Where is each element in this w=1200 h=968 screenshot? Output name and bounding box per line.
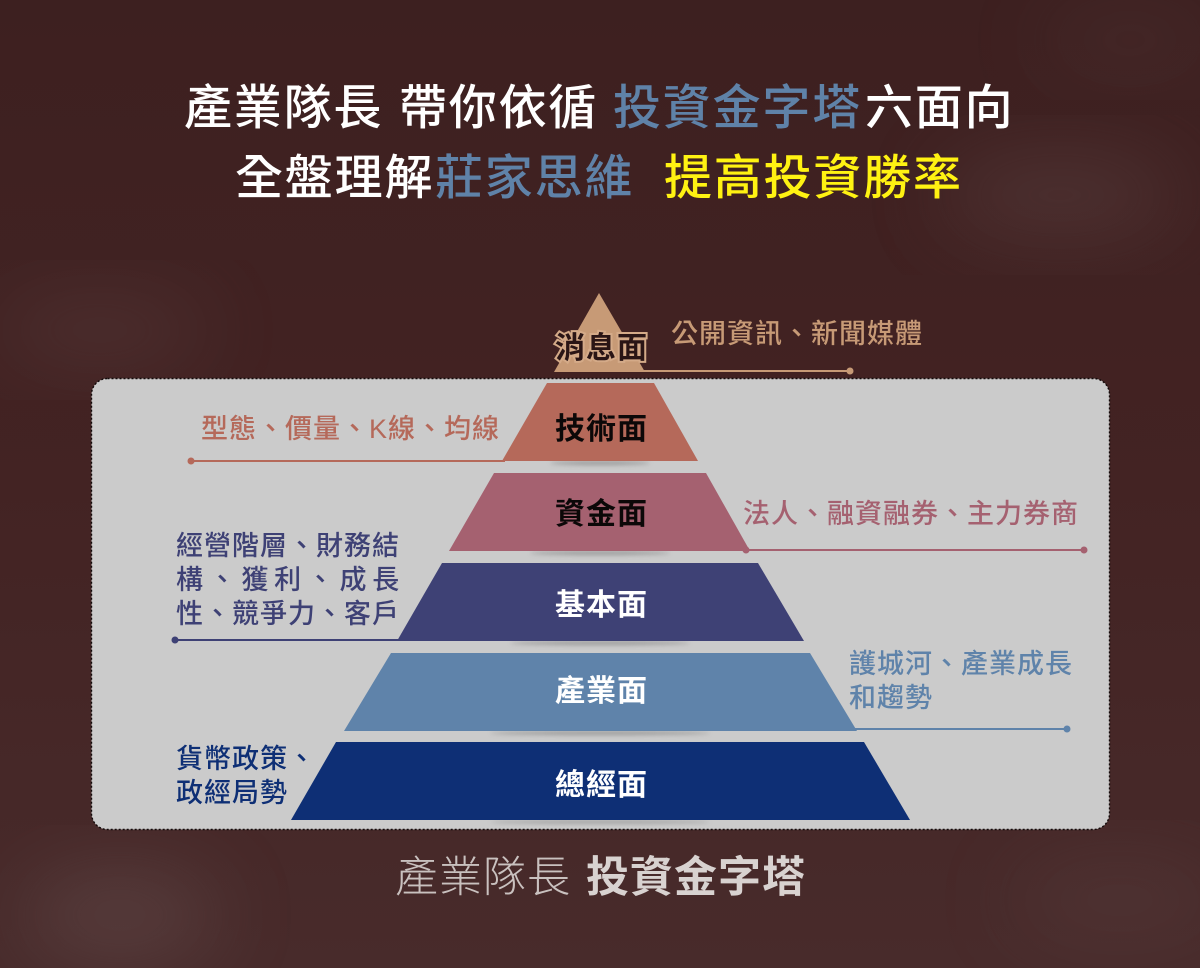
label: 基本面 detail <box>176 531 405 629</box>
label: 總經面 detail: 政經局勢 <box>176 778 288 808</box>
pyramid tier: 技術面 <box>502 383 698 465</box>
label: 產業面 detail: 和趨勢 <box>849 683 933 713</box>
caption: 產業隊長 <box>395 854 571 902</box>
title: 提高投資勝率 <box>664 152 963 205</box>
label: 基本面 detail: 經營階層、財務結 <box>176 531 400 561</box>
leader: 產業面 <box>852 726 1070 732</box>
label: 產業面 detail: 護城河、產業成長 <box>849 649 1073 679</box>
title: 產業隊長 <box>184 82 383 135</box>
pyramid tier: 技術面: 技術面 <box>555 413 648 446</box>
panel: grey backdrop <box>92 378 1110 830</box>
label: 基本面 detail: 性、競爭力、客戶 <box>176 599 400 629</box>
leader: 基本面 <box>172 636 400 644</box>
leader: 技術面 <box>188 458 505 464</box>
pyramid tier: 總經面: 總經面 <box>555 769 648 802</box>
title: 帶你依循 <box>399 82 598 135</box>
pyramid tier: 總經面 <box>291 742 910 824</box>
pyramid tier: 產業面: 產業面 <box>555 675 648 708</box>
label: 資金面 detail: 法人、融資融券、主力券商 <box>743 499 1079 529</box>
pyramid tier: 消息面: 消息面 <box>555 332 648 365</box>
title: 六面向 <box>865 82 1014 135</box>
pyramid tier: 基本面: 基本面 <box>555 589 648 622</box>
title <box>184 82 1014 205</box>
caption <box>395 854 806 902</box>
title: 莊家思維 <box>435 152 634 205</box>
label: 基本面 detail: 構、獲利、成長 <box>176 565 405 595</box>
pyramid tier: 產業面 <box>344 653 857 735</box>
leader: 消息面 <box>640 368 854 374</box>
label: 產業面 detail <box>849 649 1073 713</box>
leader: 資金面 <box>742 546 1088 554</box>
label: 總經面 detail <box>176 744 316 808</box>
title: 投資金字塔 <box>613 82 862 135</box>
label: 技術面 detail: 型態、價量、K線、均線 <box>201 414 500 444</box>
pyramid tier: 資金面: 資金面 <box>555 498 648 531</box>
label: 消息面 detail: 公開資訊、新聞媒體 <box>671 319 923 349</box>
caption: 投資金字塔 <box>586 854 806 902</box>
pyramid tier: 基本面 <box>397 563 804 645</box>
pyramid tier: 資金面 <box>449 473 750 555</box>
title: 全盤理解 <box>235 152 434 205</box>
label: 總經面 detail: 貨幣政策、 <box>176 744 316 774</box>
pyramid tier: 消息面 <box>554 293 648 372</box>
